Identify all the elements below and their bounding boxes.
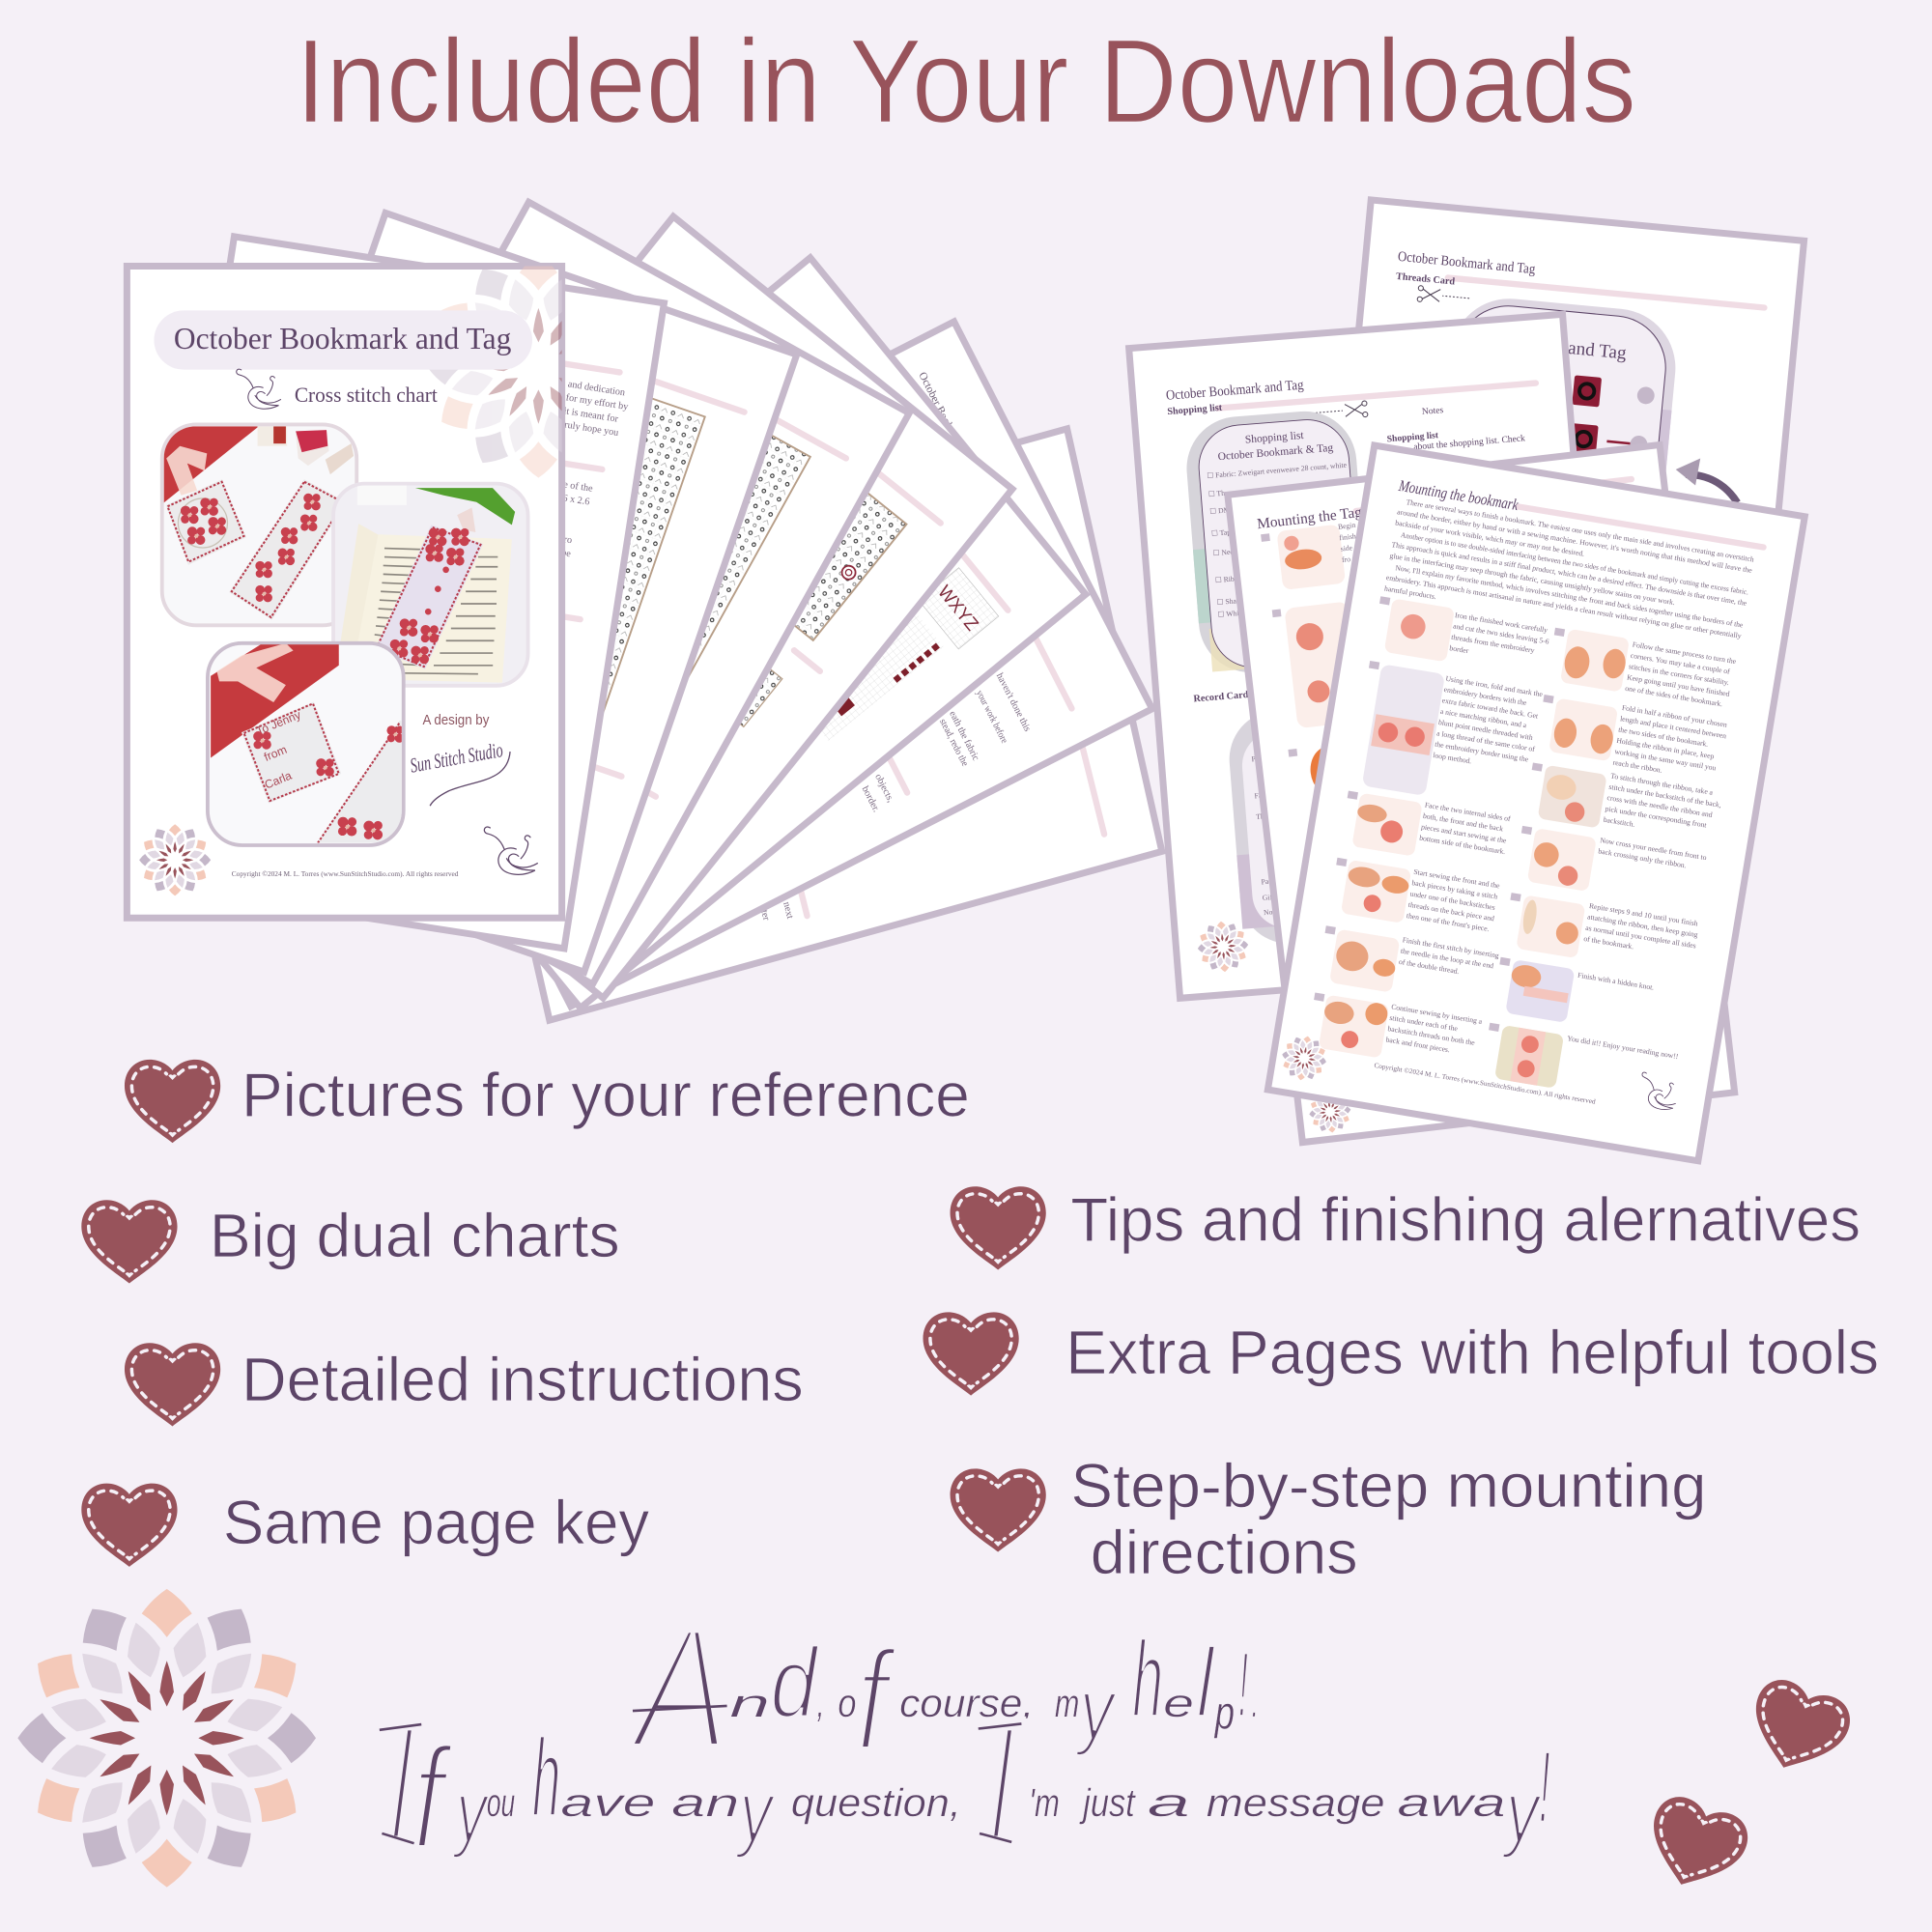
feature: extra pages: Extra Pages with helpful tools [1065,1318,1879,1387]
cover title pill: October Bookmark and Tag [174,322,511,355]
step 11 [1502,889,1700,978]
threads card page [1310,200,1804,890]
step 2 [1350,661,1545,812]
step 4: Start sewing the front and the [1413,867,1501,891]
fan page 6 [305,258,1086,1008]
designer signature: Sun Stitch Studio [409,738,504,778]
icon: flourish [484,827,537,874]
fan page 2: may be [542,545,572,559]
intro paragraph: embroidery. This approach is most artisanal in nature and yields a clean result without relying on glue or other potentially [1385,573,1742,640]
step 13 [1481,1021,1679,1107]
icon: large mandala [17,1589,316,1888]
script message line 1: course, [899,1681,1034,1725]
intro paragraph: backside of your work visible, which may or may not be desired. [1395,519,1585,558]
fan page 2: ark [527,639,542,651]
feature: step by step: directions [1091,1518,1358,1587]
heart bullet [951,1186,1046,1269]
shopping list page: ☐ Needle [1212,547,1243,557]
text: ! [1539,1728,1550,1844]
feature: tips: Tips and finishing alernatives [1070,1184,1861,1254]
step 8: the two sides of the bookmark. [1618,725,1709,749]
mounting the bookmark page [1267,445,1804,1161]
fan page 7: haven't done this [994,671,1033,733]
step 10: Now cross your needle from front to [1600,836,1707,862]
script message line 2: ave [560,1780,656,1825]
heart bullet [125,1343,220,1426]
shopping list page: Pattern [1251,753,1273,763]
shopping list page: Threads [1256,810,1280,821]
step 9 [1524,758,1723,847]
intro paragraph [1383,497,1755,651]
step 8: Fold in half a ribbon of your chosen [1621,703,1728,729]
script message line 1: d [770,1626,820,1738]
mounting the tag page: side [1340,543,1353,554]
step 3: bottom side of the bookmark. [1419,834,1506,856]
fan page 7: October Bookmark and Tag [916,370,982,485]
heart bullet [81,1484,178,1567]
step 7: one of the sides of the bookmark. [1625,684,1723,708]
feature: charts: Big dual charts [210,1201,620,1270]
fan page 8 [453,429,1162,1020]
fan page 8: next [781,901,795,920]
script message line 1: A [628,1591,729,1786]
script message line 2: h [532,1717,560,1840]
step 3: pieces and start sewing at the [1420,822,1508,845]
script message line 2 [378,1683,1550,1882]
shopping list page: Gifted [1262,892,1282,902]
fan page 7: objects, [872,773,895,805]
fan page 2: truly hope you [561,419,619,439]
step 11: as normal until you complete all sides [1585,923,1696,950]
script message line 1: y [1075,1661,1118,1757]
designer signature [409,713,510,806]
step 1: Iron the finished work carefully [1454,611,1548,635]
feature: pictures: Pictures for your reference [242,1061,970,1130]
step 11: attatching the ribbon, then keep going [1587,912,1698,939]
fan page 4 [213,202,909,984]
feature: key: Same page key [223,1488,649,1557]
step 3: both, the front and the back [1422,811,1504,834]
fan page 2: re. [523,666,534,677]
decorative heart top [1739,1673,1857,1784]
step 10: back crossing only the ribbon. [1598,846,1687,869]
step 1: threads from the embroidery [1451,633,1535,655]
step 5: the needle in the loop at the end [1400,947,1494,970]
fan page 6: WXYZ [933,582,982,635]
fan page 2: ers [521,677,534,690]
flourish [1637,1072,1680,1112]
icon: watermark mandala [429,267,562,477]
step 6: Continue sewing by inserting a [1391,1002,1484,1026]
step 1 [1372,596,1552,678]
mounting the tag page [1228,445,1735,1143]
step 2: a nice matching ribbon, and a [1439,707,1528,729]
designer signature: A design by [423,713,490,728]
step 4: then one of the front's piece. [1406,911,1490,933]
fan page 2: In the [538,569,562,583]
mounting the tag page: Mounting the Tag [1256,504,1363,532]
script message line 2: 'm [1029,1780,1060,1825]
shopping list page: Notes [1264,907,1281,917]
intro paragraph: around the border, either by hand or with a sewing machine. However, it's worth noting that this method will leave the [1397,507,1753,575]
step 9: cross with the needle the ribbon and [1606,793,1713,819]
cover title pill [154,310,532,370]
shopping list page: ☐ Thr [1208,489,1228,498]
feature: step by step: Step-by-step mounting [1070,1451,1707,1520]
fan page 7 [373,322,1152,1007]
step 9: stitch under the backstitch of the back, [1608,782,1722,810]
fan page 2: it is meant for [563,406,619,425]
fan page 7: your work before [974,689,1009,746]
threads card page: October Bookmark and Tag [1421,325,1628,364]
shopping list page: October Bookmark and Tag [1165,378,1305,404]
step 4: under one of the backstitches [1409,889,1495,912]
icon: small mandala [139,824,211,895]
script message line 1: f [856,1621,896,1780]
script message line 2: I [378,1683,428,1882]
photo: name tag pillow: To Jenny [254,707,303,738]
small mandala [1278,1033,1330,1084]
fan page 2 [134,237,664,949]
cover subtitle with flourish: Cross stitch chart [295,384,438,407]
shopping list page: Shopping list [1244,430,1305,446]
shopping list page: ☐ Tapestry [1211,526,1245,538]
script message line 1: e [1163,1681,1194,1725]
step 3: Face the two internal sides of [1424,801,1512,823]
step 7: Keep going until you have finished [1627,672,1730,698]
intro paragraph: This approach is quick and results in a stiff final product, which can be a desired effect. The downside is that over time, the [1391,540,1747,608]
script message line 2: f [412,1717,453,1879]
step 8 [1534,691,1729,784]
shopping list page: ☐ Ribbon [1215,574,1246,584]
page fan: chart and instruction pages [134,202,1162,1020]
feature list left [81,1060,970,1567]
script message line 1: ! [1238,1632,1248,1737]
decorative heart bottom [1636,1790,1755,1901]
step 7: Follow the same process to turn the [1632,639,1737,666]
step 7: stitches in the corners for stability. [1628,662,1730,687]
step 2: the embroidery border using the [1435,740,1529,764]
script message line 2: y [1501,1763,1543,1860]
step 11: of the bookmark. [1583,934,1634,951]
script message line 1: . [1252,1681,1258,1725]
step 2: Using the iron, fold and mark the [1445,674,1544,698]
shopping list page: Notes [1422,405,1444,417]
step 13: You did it!! Enjoy your reading now!! [1567,1034,1679,1061]
step 5: Finish the first stitch by inserting [1402,935,1500,960]
step 4: back pieces by taking a stitch [1411,878,1498,901]
fan page 3 [173,213,797,972]
intro paragraph: glue in the interfacing may seep through the fabric, causing unsightly yellow stains on your work. [1389,551,1676,607]
shopping list page: ☐ DMC [1209,505,1236,516]
script message line 1: l [1197,1628,1215,1738]
step 9: backstitch. [1603,815,1635,829]
step 2: a long thread of the same color of [1436,728,1536,753]
shopping list page: ☐ Fabric: Zweigart evenweave 28 count, white [1207,461,1348,480]
threads card page: October Bookmark and Tag [1397,249,1537,277]
copyright line: Copyright ©2024 M. L. Torres (www.SunStitchStudio.com). All rights reserved [232,870,459,878]
step 12 [1492,957,1655,1037]
step 6: stitch under each of the [1389,1013,1459,1033]
step 1: border [1449,643,1469,655]
step 9: To stitch through the ribbon, take a [1610,771,1714,797]
feature: instructions: Detailed instructions [242,1345,804,1414]
script message line 2: question, [791,1780,961,1825]
step 3 [1340,787,1512,871]
fan page 2: nat [525,652,539,665]
step 6 [1306,989,1484,1074]
intro paragraph: harmful products. [1383,583,1437,601]
fan page 2: for my effort by [565,392,630,412]
script message line 1: m [1055,1681,1079,1725]
heart bullet [951,1468,1046,1552]
shopping list page: ☐ White [1217,609,1245,619]
script message line 2: y [452,1763,491,1860]
intro paragraph: Another option is to use double-sided interfacing between the two sides of the bookmark and simply cutting the excess fabric. [1400,530,1749,597]
script message line 2: awa [1397,1780,1506,1825]
shopping list page: Pattern [1261,876,1283,886]
fan page 7: stead, redo the [937,717,970,769]
mounting the bookmark page: Mounting the bookmark [1397,476,1520,514]
heart bullet [923,1312,1019,1396]
photo: name tag pillow [208,643,407,845]
cover subtitle with flourish [237,369,438,409]
step 2: extra fabric toward the back. Get [1441,696,1540,721]
feature: step by step [1070,1451,1707,1587]
step 11: Repite steps 9 and 10 until you finish [1588,901,1699,928]
fan page 2: uter [529,625,547,638]
intro paragraph: There are several ways to finish a bookmark. The easiest one uses only the main side and involves creating an overstitch [1406,497,1755,564]
script message line 1: p [1213,1688,1235,1740]
photo: name tag pillow: from [262,743,289,764]
shopping list page: Shopping list [1167,403,1223,417]
script message line 2: an [671,1780,739,1825]
script message line 1 [628,1591,1258,1786]
feature list right [923,1184,1879,1587]
arrow: curved to threads card [1676,458,1737,502]
fan page 2: itch, ro [544,531,573,546]
script message line 1: h [1132,1618,1163,1740]
step 2: loop method. [1433,751,1472,765]
step 7: corners. You may take a couple of [1630,651,1731,676]
step 8: working in the same way until you [1614,747,1717,772]
script message line 1: n [729,1681,770,1725]
fan page 5 [264,216,1012,998]
step 4 [1328,855,1501,938]
script message line 2: message [1207,1780,1385,1825]
script message line 2: ou [487,1780,515,1825]
mounting the tag page: finish [1339,531,1356,542]
fan page 2: size of the [552,478,594,495]
step 4: threads on the back piece and [1407,900,1495,923]
step 1: and cut the two sides leaving 5-6 [1453,621,1549,646]
mounting the tag page: Begin [1338,521,1356,531]
threads card page: Threads Card [1396,271,1456,288]
intro paragraph: Now, I'll explain my favorite method, which involves stitching the front and back sides together using the borders of the [1395,563,1745,630]
step 5 [1317,923,1500,1009]
step 6: backstitch threads on both the [1387,1024,1476,1047]
photo: name tag pillow: Carla [263,769,294,792]
fan page 2: and dedication [567,379,626,398]
script message line 2: a [1148,1780,1190,1825]
step 9: pick under the corresponding front [1605,804,1708,830]
shopping list page: ☐ Sharp [1216,596,1243,607]
step 8: reach the ribbon. [1612,758,1662,775]
title: Included in Your Downloads [296,14,1636,148]
cover page: October Bookmark and Tag [124,263,566,922]
shopping list page: Fabric [1254,790,1274,800]
photo: pillow and bookmark [162,424,356,625]
heart bullet [81,1200,178,1283]
shopping list page: Shopping list [1386,430,1439,444]
fan page 7: eath the fabric [947,709,981,763]
heart bullet [125,1060,220,1143]
step 6: back and front pieces. [1385,1035,1451,1054]
step 10 [1514,823,1707,910]
shopping list page: about the shopping list. Check [1413,433,1525,452]
photo: bookmark in open book [333,484,528,686]
script message line 2: y [735,1763,777,1860]
script message line 2: just [1079,1780,1136,1825]
script message line 1: o [838,1681,856,1725]
shopping list page [1129,314,1613,998]
step 2: blunt point needle threaded with [1437,718,1534,742]
page copyright: Copyright ©2024 M. L. Torres (www.SunStitchStudio.com). All rights reserved [1374,1062,1597,1106]
script message line 1: , [817,1681,824,1725]
step 5: of the double thread. [1398,957,1460,976]
step 7 [1547,627,1738,710]
fan page 2: 12.6 x 2.6 [550,491,590,507]
script message line 2: I [978,1683,1029,1882]
mounting the tag page: fro [1342,554,1351,564]
step 2: embroidery borders with the [1443,685,1528,707]
step 12: Finish with a hidden knot. [1577,971,1655,992]
step 8: length and place it centered between [1620,714,1727,740]
shopping list page: October Bookmark & Tag [1217,442,1334,463]
shopping list page: Record Card [1193,690,1249,704]
fan page 8: ter [758,909,772,923]
step 8: Holding the ribbon in place, keep [1616,736,1715,761]
fan page 7: border. [860,784,881,814]
